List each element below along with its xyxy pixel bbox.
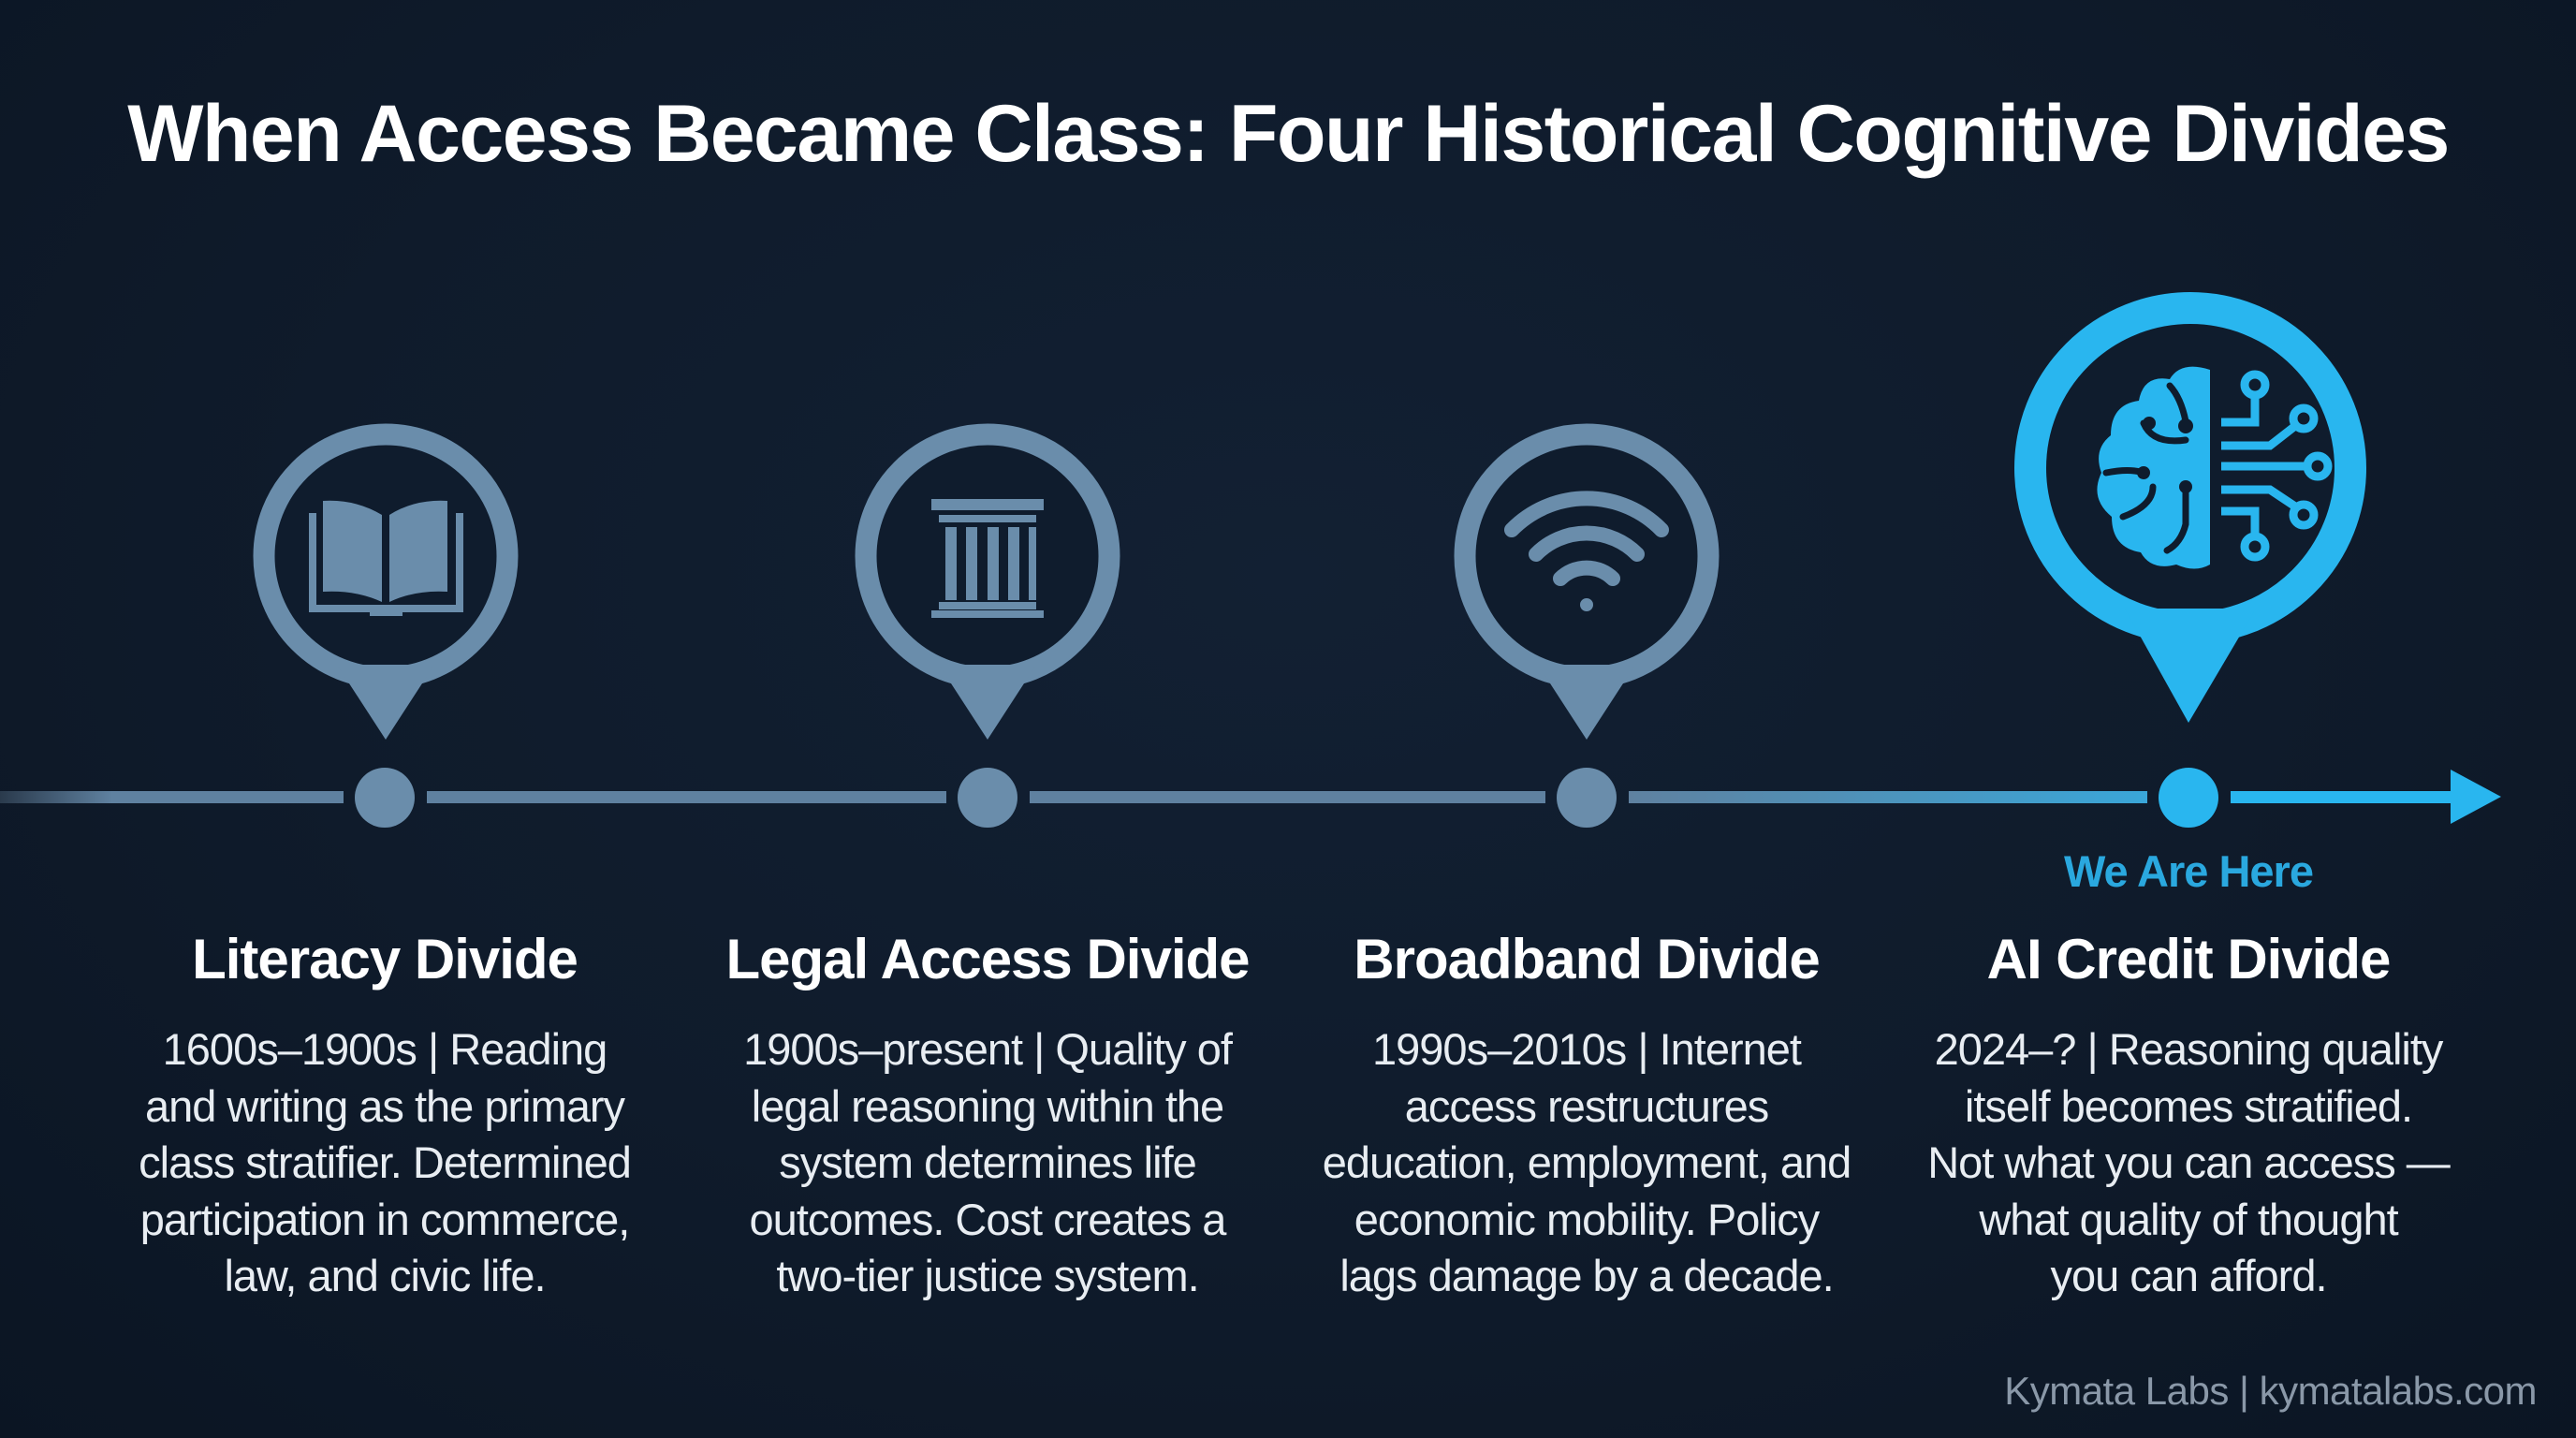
column: broadband: education, employment, and: [1323, 1137, 1851, 1187]
column: broadband: access restructures: [1405, 1080, 1768, 1131]
pin: courthouse: [866, 434, 1109, 740]
column: legal: Legal Access Divide: [725, 928, 1250, 990]
column: literacy: 1600s–1900s | Reading: [163, 1024, 607, 1074]
timeline line: [0, 770, 2501, 824]
icon: columns: [931, 499, 1044, 618]
column: broadband: lags damage by a decade.: [1339, 1251, 1834, 1300]
column: AI credit: itself becomes stratified.: [1965, 1080, 2412, 1131]
column: literacy: participation in commerce,: [140, 1195, 629, 1243]
column: literacy: class stratifier. Determined: [139, 1137, 631, 1187]
column: AI credit: [1927, 928, 2451, 1300]
pin: AI brain: [2030, 308, 2350, 723]
icon: brain circuit: [2097, 367, 2328, 569]
column: broadband: [1323, 928, 1851, 1300]
column: literacy: law, and civic life.: [224, 1251, 546, 1300]
column: literacy: and writing as the primary: [145, 1080, 624, 1131]
title: When Access Became Class: Four Historical Cognitive Divides: [127, 89, 2449, 179]
timeline dots: [355, 768, 2218, 828]
column: AI credit: Not what you can access —: [1927, 1137, 2450, 1187]
pin: wifi: [1465, 434, 1708, 740]
column: broadband: 1990s–2010s | Internet: [1372, 1024, 1801, 1074]
column: AI credit: you can afford.: [2050, 1251, 2327, 1300]
footer credit: Kymata Labs | kymatalabs.com: [2004, 1369, 2537, 1413]
icon: book: [309, 501, 463, 616]
column: legal: outcomes. Cost creates a: [750, 1195, 1225, 1243]
column: literacy: [139, 928, 631, 1300]
column: broadband: Broadband Divide: [1354, 928, 1820, 990]
column: legal: two-tier justice system.: [776, 1251, 1199, 1300]
icon: wifi: [1512, 498, 1661, 610]
column: literacy: Literacy Divide: [192, 928, 578, 990]
column: legal: system determines life: [779, 1137, 1196, 1187]
column: AI credit: what quality of thought: [1979, 1195, 2398, 1243]
we are here label: We Are Here: [2064, 846, 2313, 896]
column: legal: [725, 928, 1250, 1300]
column: AI credit: 2024–? | Reasoning quality: [1935, 1024, 2442, 1074]
column: legal: 1900s–present | Quality of: [743, 1024, 1232, 1074]
pin: book: [264, 434, 507, 740]
column: AI credit: AI Credit Divide: [1987, 928, 2390, 990]
column: legal: legal reasoning within the: [752, 1080, 1223, 1131]
column: broadband: economic mobility. Policy: [1354, 1195, 1819, 1243]
